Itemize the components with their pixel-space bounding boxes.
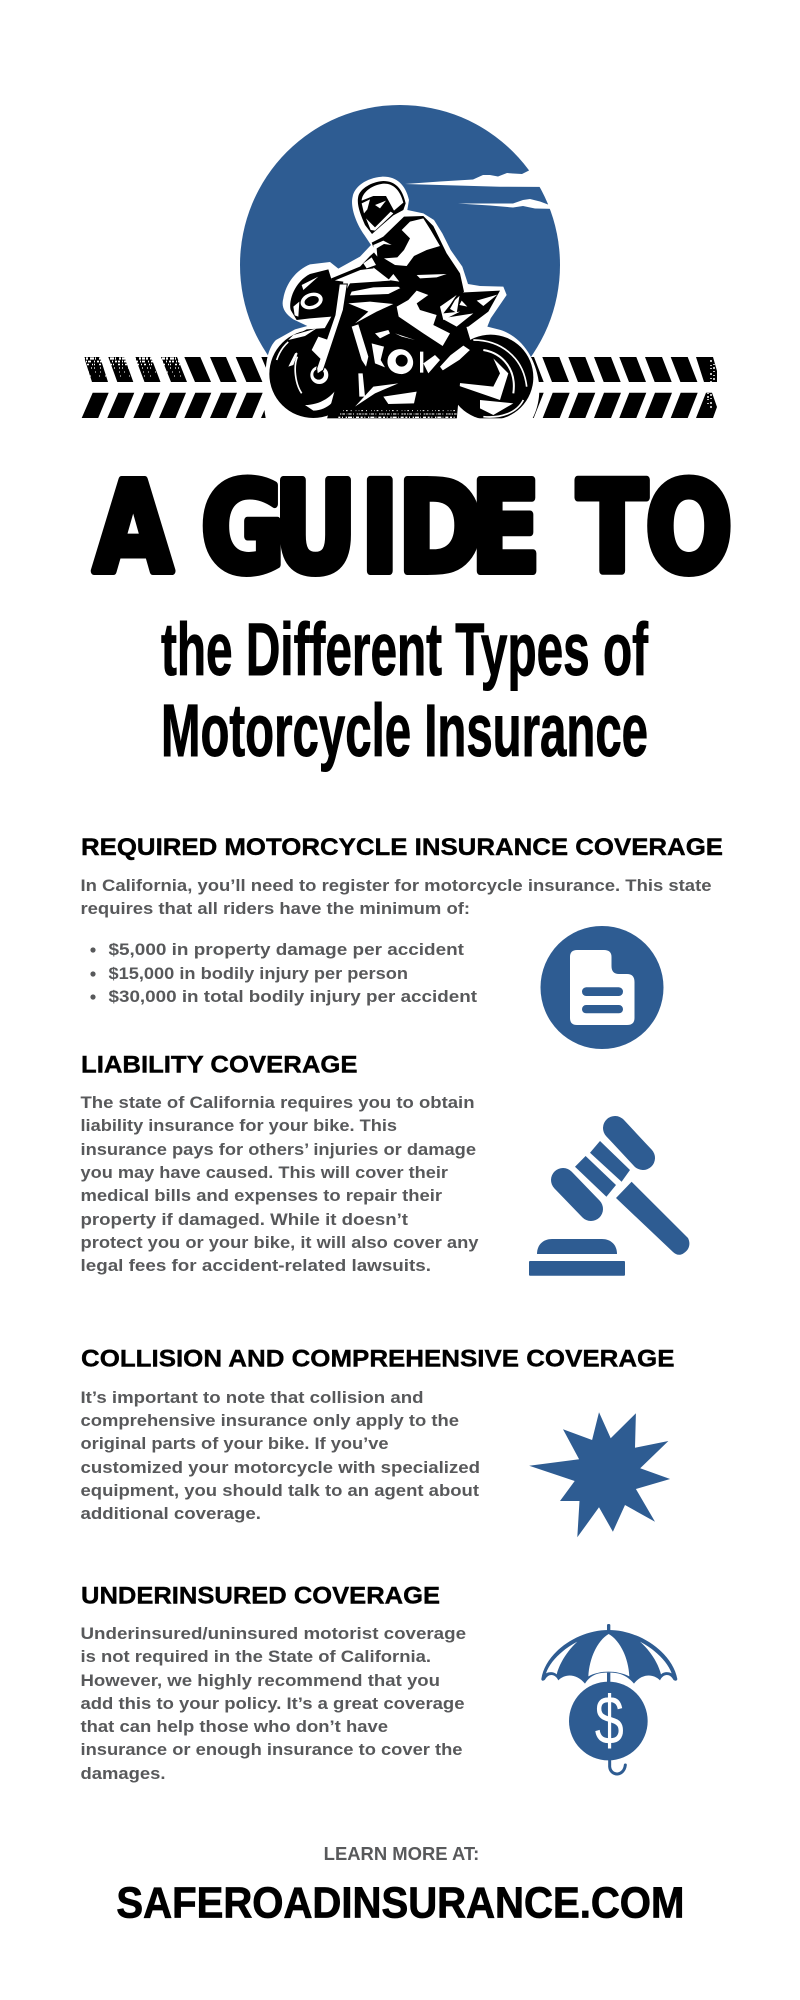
panel: required coverage <box>80 834 723 1049</box>
body text <box>80 1093 479 1275</box>
subtitle <box>161 608 648 772</box>
body text: original parts of your bike. If you’ve <box>80 1434 388 1453</box>
body text: medical bills and expenses to repair their <box>80 1186 442 1205</box>
body text: The state of California requires you to obtain <box>80 1093 475 1112</box>
body text: customized your motorcycle with specialized <box>80 1458 480 1477</box>
heading: LIABILITY COVERAGE <box>81 1052 358 1079</box>
blue sun circle with clouds <box>240 105 560 357</box>
body text: add this to your policy. It’s a great coverage <box>80 1694 464 1713</box>
bullet list: $30,000 in total bodily injury per accident <box>108 987 477 1006</box>
bullet list: $15,000 in bodily injury per person <box>108 964 408 983</box>
rider body <box>359 216 470 370</box>
white sticker outline <box>263 177 539 420</box>
body text: damages. <box>80 1764 166 1783</box>
intro text: requires that all riders have the minimum of: <box>80 899 470 918</box>
rider on motorcycle <box>260 177 540 422</box>
icon: starburst <box>529 1412 670 1537</box>
panel: underinsured coverage <box>80 1582 677 1783</box>
body text: insurance or enough insurance to cover the <box>80 1740 462 1759</box>
body text: protect you or your bike, it will also cover any <box>80 1233 479 1252</box>
front fairing <box>290 269 343 320</box>
heading: UNDERINSURED COVERAGE <box>81 1582 440 1609</box>
icon: umbrella over dollar coin: $ <box>595 1682 624 1759</box>
footer call to action <box>116 1844 684 1928</box>
body text: equipment, you should talk to an agent about <box>80 1481 479 1500</box>
bullet list <box>90 940 477 1006</box>
body text: liability insurance for your bike. This <box>80 1116 397 1135</box>
body text: comprehensive insurance only apply to the <box>80 1411 459 1430</box>
helmet <box>358 181 406 234</box>
main title: A GUIDE TO <box>93 455 732 601</box>
intro text: In California, you’ll need to register for motorcycle insurance. This state <box>80 876 712 895</box>
panel: collision and comprehensive coverage <box>80 1346 674 1537</box>
thigh highlight <box>397 291 450 346</box>
body text: is not required in the State of California. <box>80 1647 431 1666</box>
engine and frame mass <box>320 280 473 420</box>
intro text <box>80 876 712 918</box>
bullet list: $5,000 in property damage per accident <box>108 940 464 959</box>
body text: property if damaged. While it doesn’t <box>80 1210 408 1229</box>
road grit <box>338 411 458 417</box>
icon: umbrella over dollar coin <box>541 1624 677 1774</box>
jacket sleeve <box>384 218 440 266</box>
engine cylinder <box>387 349 413 374</box>
body text: you may have caused. This will cover their <box>80 1163 448 1182</box>
body text: It’s important to note that collision and <box>80 1388 424 1407</box>
frame highlights <box>348 287 417 407</box>
tail section <box>448 291 500 330</box>
handlebar <box>332 267 373 280</box>
body text: Underinsured/uninsured motorist coverage <box>80 1624 466 1643</box>
icon: document <box>540 926 664 1049</box>
body text <box>80 1624 466 1783</box>
body text: that can help those who don’t have <box>80 1717 388 1736</box>
website: SAFEROADINSURANCE.COM <box>116 1879 684 1928</box>
front fork <box>317 284 347 374</box>
learn more label: LEARN MORE AT: <box>324 1844 479 1864</box>
hero illustration: motorcycle rider <box>82 105 717 425</box>
body text: However, we highly recommend that you <box>80 1671 440 1690</box>
heading: REQUIRED MOTORCYCLE INSURANCE COVERAGE <box>81 834 723 861</box>
body text: legal fees for accident-related lawsuits. <box>80 1256 431 1275</box>
body text <box>80 1388 480 1523</box>
boot <box>439 345 471 371</box>
heading: COLLISION AND COMPREHENSIVE COVERAGE <box>81 1346 674 1373</box>
body text: additional coverage. <box>80 1504 261 1523</box>
panel: liability coverage <box>80 1052 689 1276</box>
front wheel <box>269 330 357 418</box>
icon: gavel <box>529 1128 689 1276</box>
body text: insurance pays for others’ injuries or damage <box>80 1140 476 1159</box>
rear wheel <box>448 335 533 420</box>
tire tracks <box>82 357 717 418</box>
